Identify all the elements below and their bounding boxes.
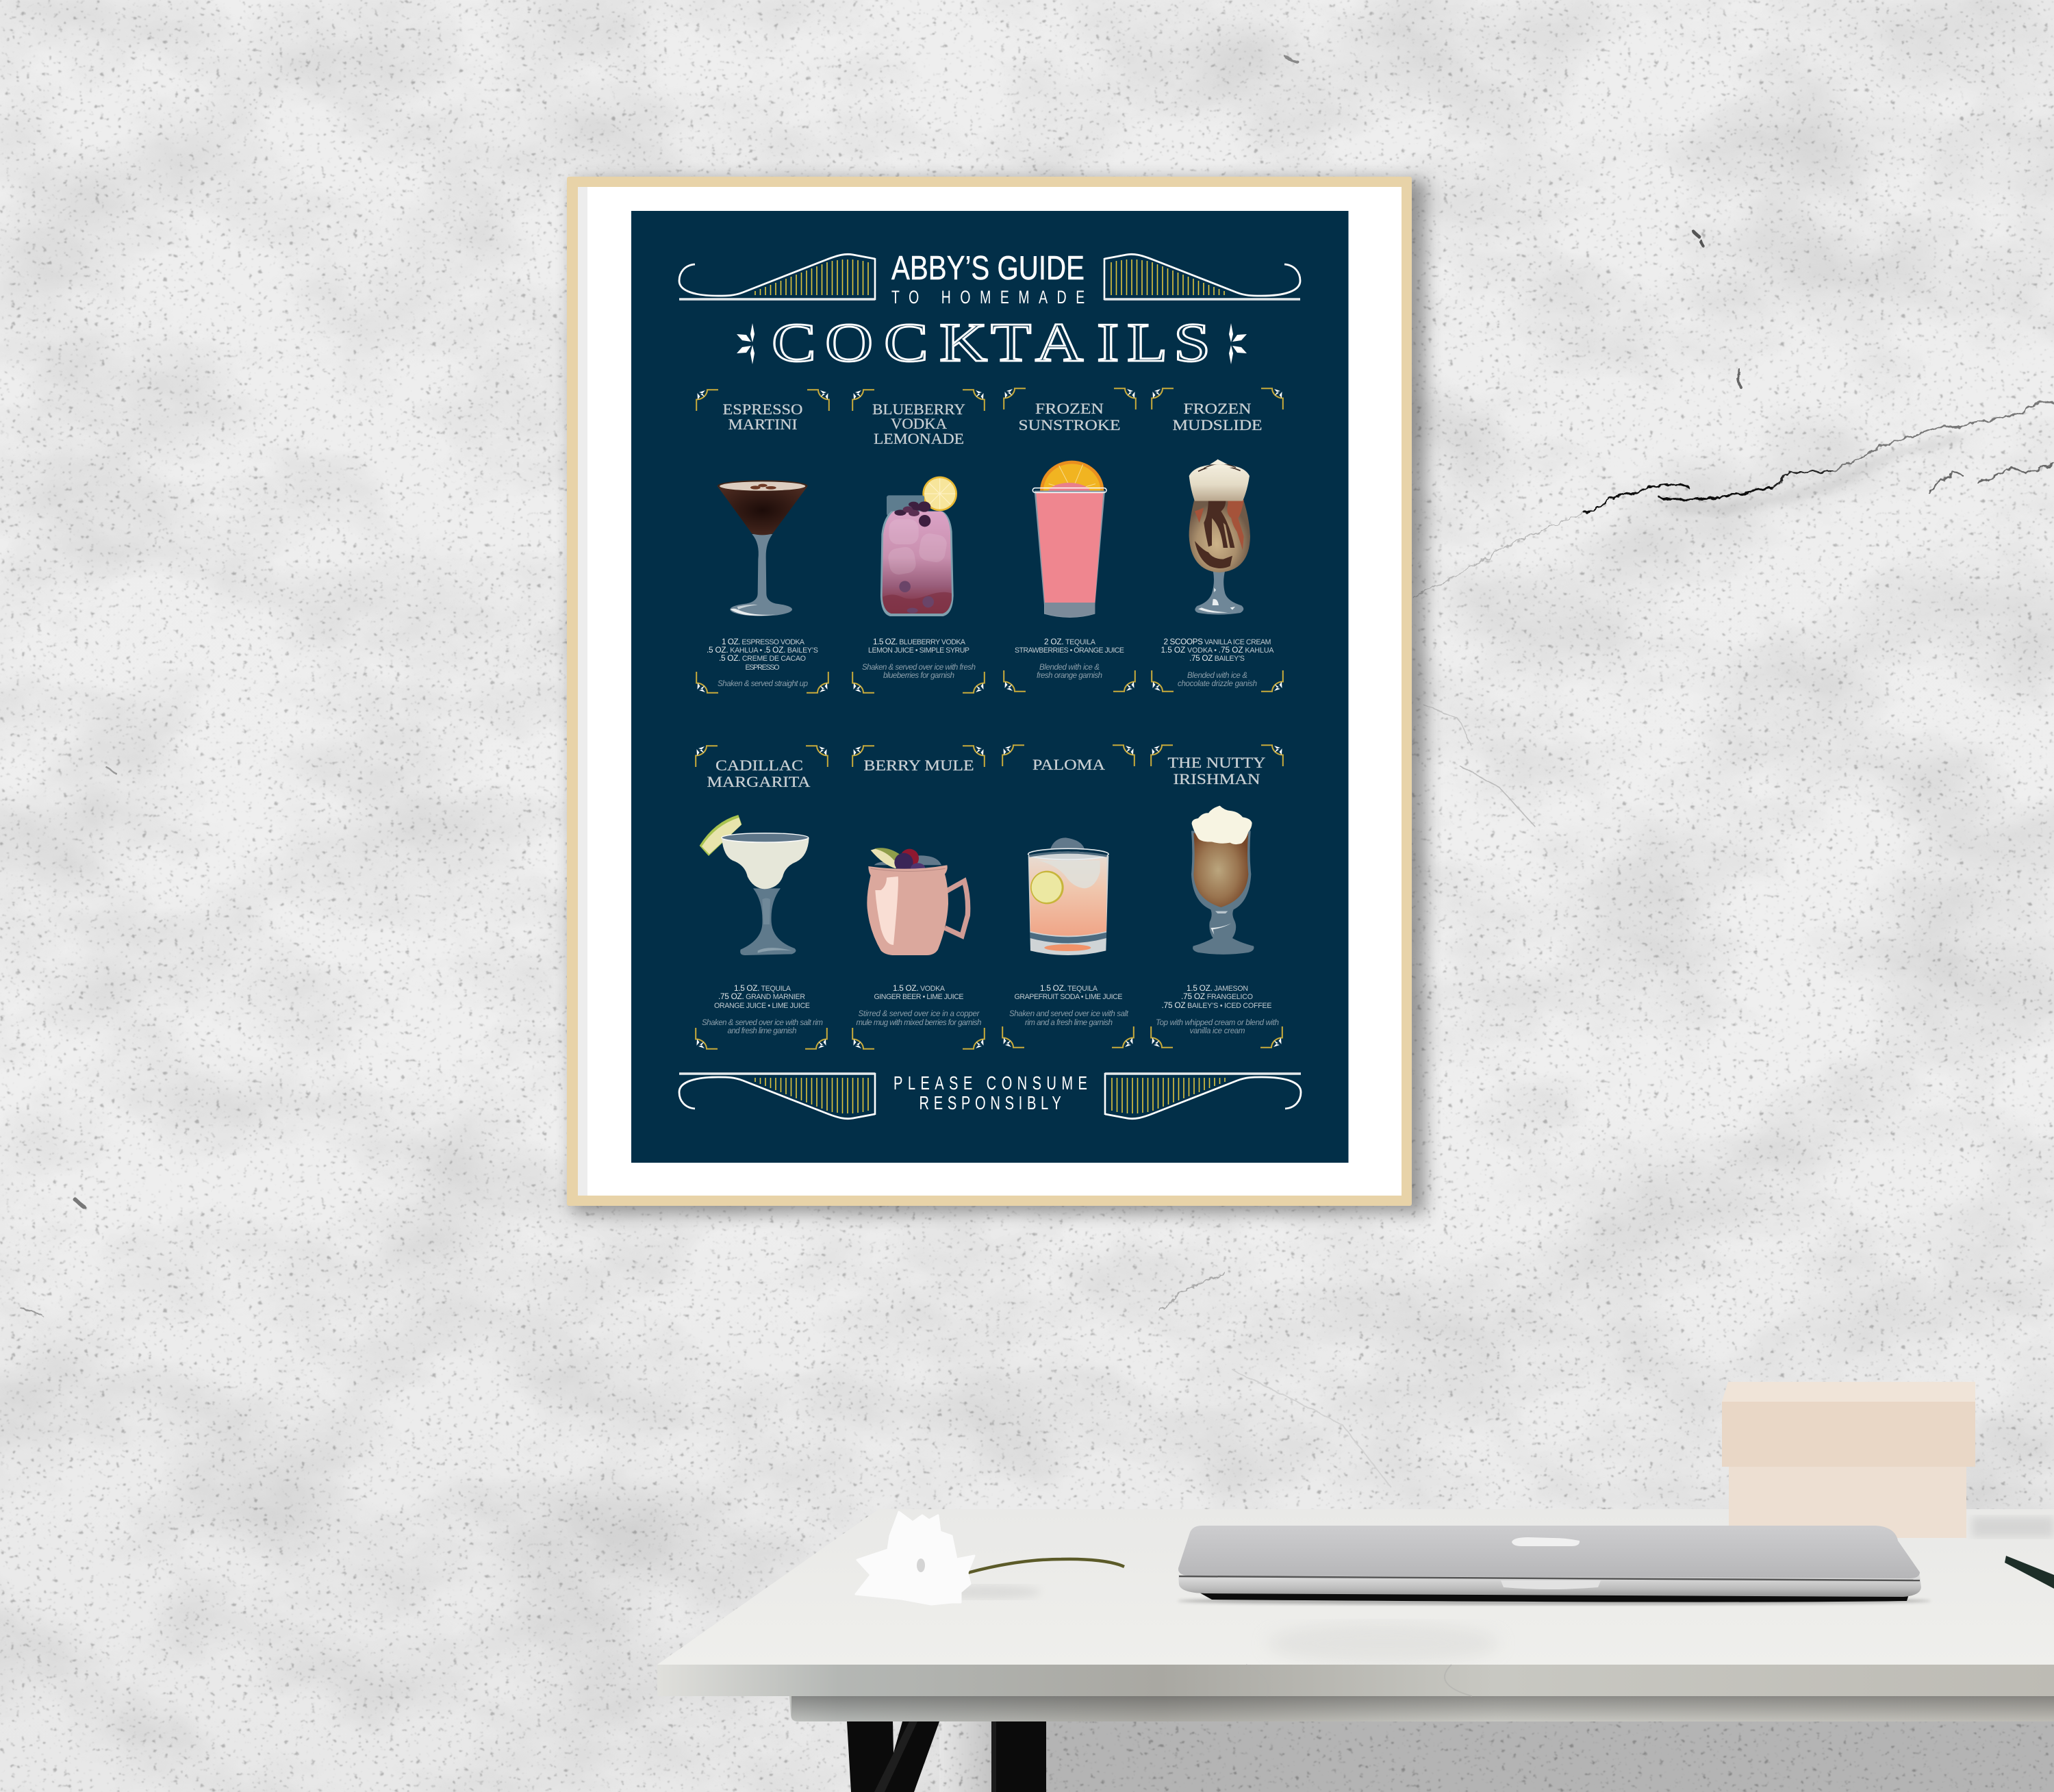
panel: Espresso Martini xyxy=(696,390,829,693)
panel: Blueberry Vodka Lemonade xyxy=(852,390,985,693)
icon: margarita glass xyxy=(700,815,809,955)
method: blueberries for garnish xyxy=(883,672,954,680)
ingredients: .75 OZ FRANGELICO xyxy=(1181,992,1253,1001)
method: and fresh lime garnish xyxy=(727,1027,797,1035)
ingredients: 1.5 OZ. VODKA xyxy=(893,983,946,993)
method xyxy=(1037,664,1102,680)
table apron xyxy=(789,1696,2054,1721)
heading: VODKA xyxy=(891,415,948,432)
heading xyxy=(723,401,802,433)
method xyxy=(862,664,976,680)
ingredients: .75 OZ BAILEY’S • ICED COFFEE xyxy=(1161,1000,1272,1010)
ingredients: ESPRESSO xyxy=(745,664,779,672)
icon: mudslide hurricane glass xyxy=(1189,459,1250,614)
panel: Paloma xyxy=(1002,745,1134,1048)
laptop lid xyxy=(1178,1526,1920,1578)
header ornament left xyxy=(679,254,875,299)
ornament: left sparkle xyxy=(737,323,755,364)
heading: MARGARITA xyxy=(707,773,811,790)
heading xyxy=(1172,400,1263,433)
table legs xyxy=(847,1721,1046,1792)
heading xyxy=(707,757,811,790)
ingredients: 2 SCOOPS VANILLA ICE CREAM xyxy=(1164,637,1271,646)
ingredients: .5 OZ. KAHLUA • .5 OZ. BAILEY’S xyxy=(707,645,818,655)
method: rim and a fresh lime garnish xyxy=(1025,1019,1113,1027)
panel: Berry Mule xyxy=(852,746,985,1049)
ingredients xyxy=(714,983,810,1010)
heading: SUNSTROKE xyxy=(1019,416,1120,433)
panel: Cadillac Margarita xyxy=(696,746,828,1049)
icon: copper mug xyxy=(867,848,968,955)
method xyxy=(1009,1010,1129,1027)
table shadow on wall xyxy=(939,1721,2054,1792)
table front edge xyxy=(657,1665,2054,1696)
title: Abby's Guide: ABBY’S GUIDE xyxy=(891,250,1085,287)
ingredients: GRAPEFRUIT SODA • LIME JUICE xyxy=(1015,993,1123,1001)
header ornament right xyxy=(1104,254,1300,299)
ingredients: .5 OZ. CREME DE CACAO xyxy=(719,653,806,663)
heading: THE NUTTY xyxy=(1168,754,1265,771)
method: Stirred & served over ice in a copper xyxy=(859,1010,980,1018)
heading: CADILLAC xyxy=(715,757,803,774)
method xyxy=(1178,672,1257,688)
title: Cocktails: COCKTAILS xyxy=(772,312,1210,373)
method xyxy=(1156,1019,1279,1035)
icon: frozen sunstroke glass xyxy=(1032,461,1106,618)
ingredients: .75 OZ. GRAND MARNIER xyxy=(718,992,805,1001)
footer ornament right xyxy=(1105,1074,1301,1119)
method: Top with whipped cream or blend with xyxy=(1156,1019,1279,1027)
picture frame with mat xyxy=(567,177,1412,1206)
footer text: RESPONSIBLY xyxy=(919,1093,1061,1114)
icon: mason jar xyxy=(880,477,957,616)
icon: paloma rocks glass xyxy=(1028,837,1108,955)
ingredients: GINGER BEER • LIME JUICE xyxy=(874,993,964,1001)
ingredients: 1 OZ. ESPRESSO VODKA xyxy=(722,637,805,646)
ingredients: 1.5 OZ. TEQUILA xyxy=(1040,983,1098,993)
poster xyxy=(631,211,1349,1163)
picture frame shadow xyxy=(572,179,1425,1213)
ingredients: STRAWBERRIES • ORANGE JUICE xyxy=(1015,646,1124,655)
ingredients: LEMON JUICE • SIMPLE SYRUP xyxy=(868,646,969,655)
method: Blended with ice & xyxy=(1039,664,1100,672)
ingredients: 1.5 OZ. JAMESON xyxy=(1187,983,1248,993)
laptop notch xyxy=(1501,1580,1601,1589)
upper box xyxy=(1722,1402,1975,1467)
heading: ESPRESSO xyxy=(723,401,802,418)
icon: martini glass xyxy=(717,480,808,616)
method: vanilla ice cream xyxy=(1190,1027,1245,1035)
laptop base xyxy=(1178,1575,1921,1597)
laptop xyxy=(1178,1526,1931,1605)
ingredients xyxy=(707,637,818,672)
stacked boxes xyxy=(1722,1382,1975,1538)
method: Shaken and served over ice with salt xyxy=(1009,1010,1129,1018)
icon: irish coffee glass xyxy=(1191,806,1254,955)
heading xyxy=(1019,400,1120,433)
heading: MUDSLIDE xyxy=(1172,416,1263,433)
ingredients: 1.5 OZ VODKA • .75 OZ KAHLUA xyxy=(1161,645,1274,655)
subtitle: to homemade: TO HOMEMADE xyxy=(891,287,1085,307)
ingredients xyxy=(1161,983,1272,1010)
panel: Frozen Sunstroke xyxy=(1004,388,1136,692)
heading: FROZEN xyxy=(1035,400,1104,417)
ingredients: 2 OZ. TEQUILA xyxy=(1044,637,1096,646)
ingredients: .75 OZ BAILEY’S xyxy=(1189,653,1245,663)
heading: PALOMA xyxy=(1032,756,1106,773)
ingredients: ORANGE JUICE • LIME JUICE xyxy=(714,1002,810,1010)
method: Shaken & served over ice with salt rim xyxy=(702,1019,823,1027)
flower xyxy=(856,1512,1124,1604)
method: fresh orange garnish xyxy=(1037,672,1102,680)
heading: IRISHMAN xyxy=(1174,770,1260,787)
heading xyxy=(1168,754,1265,787)
footer text xyxy=(893,1073,1087,1114)
heading: FROZEN xyxy=(1183,400,1252,417)
ingredients xyxy=(1015,637,1124,655)
heading: LEMONADE xyxy=(874,430,964,447)
method xyxy=(702,1019,823,1035)
method: Shaken & served over ice with fresh xyxy=(862,664,976,672)
panel: Frozen Mudslide xyxy=(1152,388,1283,692)
ingredients xyxy=(1161,637,1274,663)
method: chocolate drizzle ganish xyxy=(1178,680,1257,688)
footer ornament left xyxy=(679,1074,875,1119)
heading: BLUEBERRY xyxy=(872,401,965,418)
table top xyxy=(657,1509,2054,1721)
ingredients: 1.5 OZ. BLUEBERRY VODKA xyxy=(873,637,966,646)
lower box xyxy=(1729,1467,1966,1538)
footer text: PLEASE CONSUME xyxy=(893,1073,1087,1094)
method xyxy=(856,1010,982,1027)
heading xyxy=(872,401,965,447)
heading: BERRY MULE xyxy=(864,757,974,774)
ingredients xyxy=(1015,983,1123,1001)
apple logo xyxy=(1512,1537,1580,1546)
ingredients: 1.5 OZ. TEQUILA xyxy=(734,983,791,993)
method: Shaken & served straight up xyxy=(718,680,809,688)
ingredients xyxy=(868,637,969,655)
panel: The Nutty Irishman xyxy=(1151,745,1283,1048)
pen xyxy=(2005,1556,2054,1589)
ornament: right sparkle xyxy=(1229,323,1247,364)
ingredients xyxy=(874,983,964,1001)
poster background xyxy=(631,211,1349,1163)
wall cracks xyxy=(21,58,2054,1486)
method: Blended with ice & xyxy=(1187,672,1247,680)
method: mule mug with mixed berries for garnish xyxy=(856,1019,982,1027)
heading: MARTINI xyxy=(728,416,797,433)
